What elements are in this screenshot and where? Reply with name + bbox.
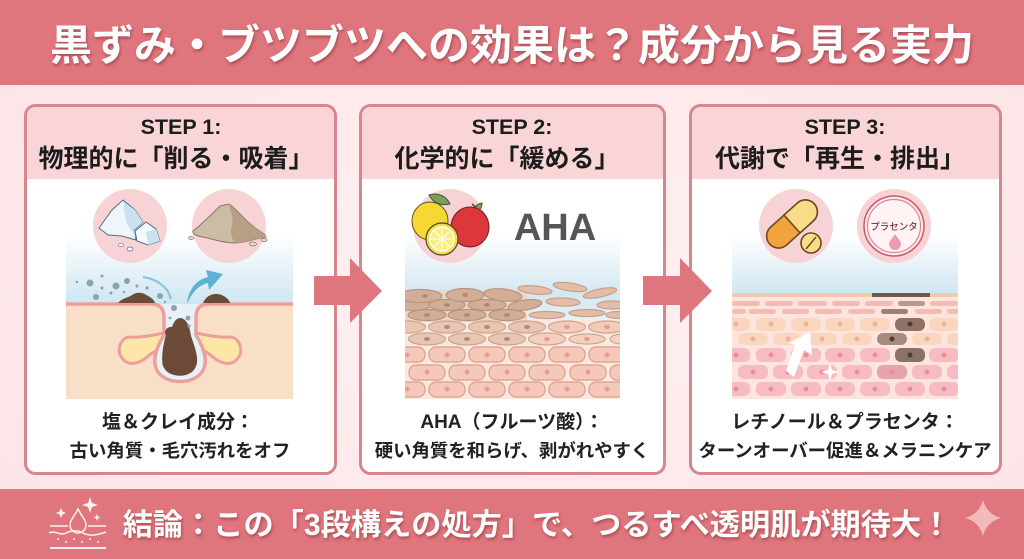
illustration: pore cross-section (66, 189, 293, 399)
arrow: step 1 to step 2 (314, 258, 382, 323)
icon: skin droplet (49, 497, 106, 548)
caption: step 1 (70, 410, 290, 461)
illustration: softened skin cells (405, 246, 620, 399)
cell nuclei (404, 325, 610, 392)
conclusion banner (0, 489, 1024, 559)
cell nuclei (734, 352, 946, 392)
title banner (0, 0, 1024, 85)
caption: step 3: レチノール＆プラセンタ： (731, 411, 959, 433)
heading: step 2: 化学的に「緩める」 (394, 145, 620, 173)
icon: sparkle (821, 363, 839, 381)
icon: clogged sebum (162, 318, 197, 376)
icon: fruit (412, 189, 489, 263)
panel: step 2 (360, 106, 664, 474)
arrow: small blue arc (143, 277, 171, 299)
heading: step 2 (394, 115, 620, 173)
cells: upper rows (395, 287, 543, 320)
label: AHA: AHA (514, 207, 596, 249)
caption: step 2: 硬い角質を和らげ、剥がれやすく (375, 440, 649, 461)
cells: detached flakes (518, 281, 630, 318)
icon: clay (188, 189, 267, 263)
cells: lower rows (405, 346, 620, 398)
caption: step 2: AHA（フルーツ酸）： (420, 411, 604, 433)
heading: step 1: 物理的に「削る・吸着」 (38, 145, 314, 173)
icon: placenta badge (857, 189, 931, 263)
icon: placenta badge: プラセンタ (870, 221, 918, 233)
icon: salt (93, 189, 167, 263)
pink cell rows (732, 348, 958, 396)
conclusion text: 結論：この「3段構えの処方」で、つるすべ透明肌が期待大！ (123, 507, 951, 542)
illustration: skin turnover (732, 245, 958, 399)
heading: step 3 (715, 115, 965, 173)
cells: middle rows (388, 321, 634, 345)
icon: dirt mounds (118, 293, 230, 303)
caption: step 2 (375, 411, 649, 461)
icon: capsule and tablet (759, 189, 833, 263)
caption: step 1: 塩＆クレイ成分： (102, 410, 254, 433)
caption: step 1: 古い角質・毛穴汚れをオフ (70, 440, 290, 461)
icon: sebaceous glands (119, 333, 241, 364)
icon: sparkle (965, 500, 1001, 536)
heading: step 3: 代謝で「再生・排出」 (715, 145, 965, 173)
caption: step 3: ターンオーバー促進＆メラニンケア (698, 440, 992, 461)
thin surface cells (732, 301, 959, 314)
arrow: blue exit arrow (187, 270, 223, 304)
arrow: white upward (786, 332, 812, 377)
heading: step 3: STEP 3: (805, 115, 885, 139)
panel: step 3 (690, 106, 1000, 474)
title banner: 黒ずみ・ブツブツへの効果は？成分から見る実力 (50, 22, 974, 69)
icon: pore opening (66, 304, 293, 382)
icon: scrub particles (76, 274, 191, 328)
heading: step 1 (38, 115, 314, 173)
peach cell rows (732, 318, 958, 345)
caption: step 3 (698, 411, 992, 461)
arrow: step 2 to step 3 (643, 258, 712, 323)
heading: step 1: STEP 1: (141, 115, 221, 139)
panel: step 1 (26, 106, 336, 474)
heading: step 2: STEP 2: (472, 115, 552, 139)
